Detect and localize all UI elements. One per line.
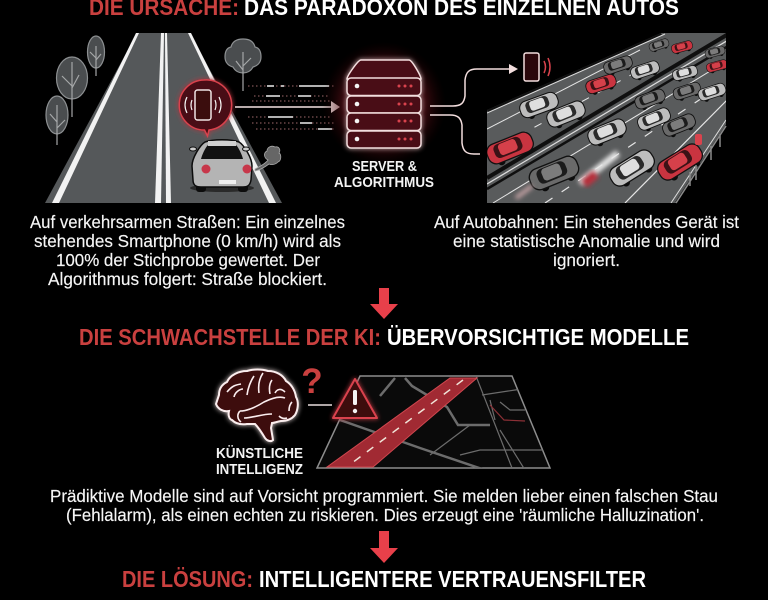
- road markings: [52, 33, 276, 203]
- heading: weakness of AI: [79, 324, 689, 350]
- cars: [648, 38, 670, 52]
- illustration: quiet road with single car: [45, 33, 282, 203]
- text: right explanation: [434, 212, 739, 270]
- branch arrows: [430, 64, 518, 154]
- heading: solution: INTELLIGENTERE VERTRAUENSFILTER: [259, 566, 646, 592]
- icon: question mark: ?: [301, 362, 323, 401]
- icon: exhaust smoke: [255, 146, 281, 171]
- text: right explanation: ignoriert.: [553, 250, 620, 270]
- trees: [46, 36, 261, 145]
- icon: warning triangle: [333, 379, 377, 418]
- server label: ALGORITHMUS: [334, 175, 434, 191]
- lane markings: [487, 30, 735, 203]
- text: left explanation: stehendes Smartphone (0 km/h) wird als: [34, 231, 341, 251]
- illustration: crowded motorway: [480, 30, 735, 205]
- text: left explanation: Auf verkehrsarmen Straßen: Ein einzelnes: [30, 212, 345, 232]
- title: [89, 0, 679, 20]
- label: artificial intelligence: INTELLIGENZ: [216, 462, 303, 478]
- data stream to server: [235, 86, 340, 129]
- icon: brain: [216, 370, 298, 441]
- text: left explanation: Algorithmus folgert: Straße blockiert.: [48, 269, 327, 289]
- text: left explanation: [30, 212, 345, 289]
- heading: weakness of AI: DIE SCHWACHSTELLE DER KI:: [79, 324, 381, 350]
- text: AI explanation: Prädiktive Modelle sind auf Vorsicht programmiert. Sie melden lieber einen falschen Stau: [50, 486, 718, 506]
- text: right explanation: eine statistische Anomalie und wird: [453, 231, 720, 251]
- heading: solution: [122, 566, 646, 592]
- text: AI explanation: (Fehlalarm), als einen echten zu riskieren. Dies erzeugt eine 'räumliche Halluzination'.: [66, 505, 704, 525]
- text: AI explanation: [50, 486, 718, 525]
- icon: phone bubble: [179, 80, 232, 136]
- heading: weakness of AI: ÜBERVORSICHTIGE MODELLE: [387, 324, 689, 350]
- icon: ignored phone: [524, 53, 550, 81]
- arrow: down: [370, 531, 398, 563]
- connector: [308, 404, 332, 406]
- server label: SERVER &: [352, 159, 417, 175]
- text: right explanation: Auf Autobahnen: Ein stehendes Gerät ist: [434, 212, 739, 232]
- icon: stationary car: [190, 140, 281, 192]
- arrow: down: [370, 288, 398, 319]
- guard rail: [676, 126, 726, 203]
- illustration: city map with false jam: [317, 376, 550, 470]
- heading: solution: DIE LÖSUNG:: [122, 566, 253, 592]
- icon: alert marker: [695, 134, 702, 145]
- label: artificial intelligence: KÜNSTLICHE: [216, 445, 303, 462]
- server label: [334, 159, 434, 191]
- motion blur: [580, 153, 618, 183]
- text: left explanation: 100% der Stichprobe gewertet. Der: [56, 250, 320, 270]
- icon: server stack: [322, 42, 446, 166]
- label: artificial intelligence: [216, 445, 303, 478]
